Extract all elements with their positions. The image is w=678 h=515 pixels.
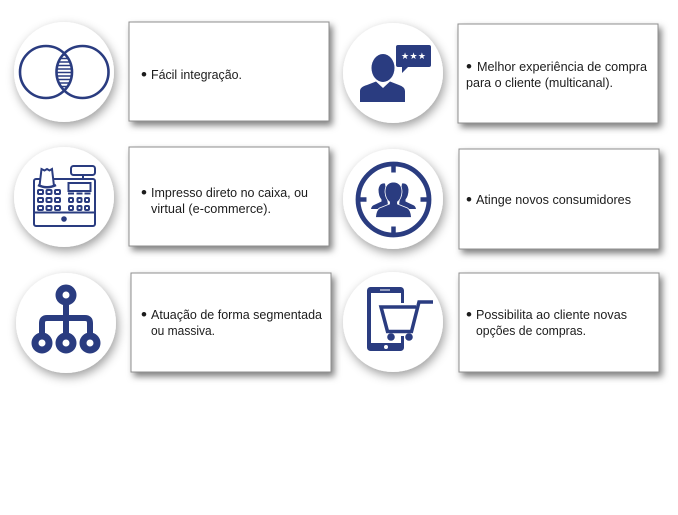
icon circle: venn diagram bbox=[14, 22, 114, 122]
text box: impresso: virtual (e-commerce). bbox=[151, 201, 271, 216]
text box: compras: Possibilita ao cliente novas bbox=[476, 307, 627, 322]
text box: integração: • bbox=[141, 65, 147, 84]
text box: impresso bbox=[129, 147, 329, 246]
panel: compras bbox=[343, 272, 659, 372]
text box: compras: • bbox=[466, 305, 472, 324]
text box: segmentada: • bbox=[141, 305, 147, 324]
icon circle: person with rating bubble bbox=[343, 23, 443, 123]
text box: compras bbox=[459, 273, 659, 372]
text box: impresso: Impresso direto no caixa, ou bbox=[151, 185, 308, 200]
text box: segmentada bbox=[131, 273, 331, 372]
text box: experiência: para o cliente (multicanal). bbox=[466, 75, 613, 90]
text box: segmentada: Atuação de forma segmentada bbox=[151, 307, 323, 322]
panel: impresso bbox=[14, 147, 329, 247]
text box: impresso: • bbox=[141, 183, 147, 202]
panel: segmentada bbox=[16, 273, 331, 373]
panel: integração bbox=[14, 22, 329, 122]
text box: integração bbox=[129, 22, 329, 121]
text box: experiência: Melhor experiência de compra bbox=[477, 59, 648, 74]
text box: segmentada: ou massiva. bbox=[151, 323, 215, 338]
text box: integração: Fácil integração. bbox=[151, 67, 242, 82]
icon circle: cash register bbox=[14, 147, 114, 247]
text box: experiência bbox=[458, 24, 658, 123]
text box: consumidores bbox=[459, 149, 659, 249]
text box: consumidores: Atinge novos consumidores bbox=[476, 192, 631, 207]
icon circle: person with rating bubble: ★★★ bbox=[401, 51, 426, 61]
text box: compras: opções de compras. bbox=[476, 323, 586, 338]
panel: consumidores bbox=[343, 149, 659, 249]
icon circle: target with people bbox=[343, 149, 443, 249]
icon circle: network tree bbox=[16, 273, 116, 373]
icon circle: phone and cart bbox=[343, 272, 443, 372]
text box: experiência: • bbox=[466, 57, 472, 76]
text box: consumidores: • bbox=[466, 190, 472, 209]
panel: experiência bbox=[343, 23, 658, 123]
